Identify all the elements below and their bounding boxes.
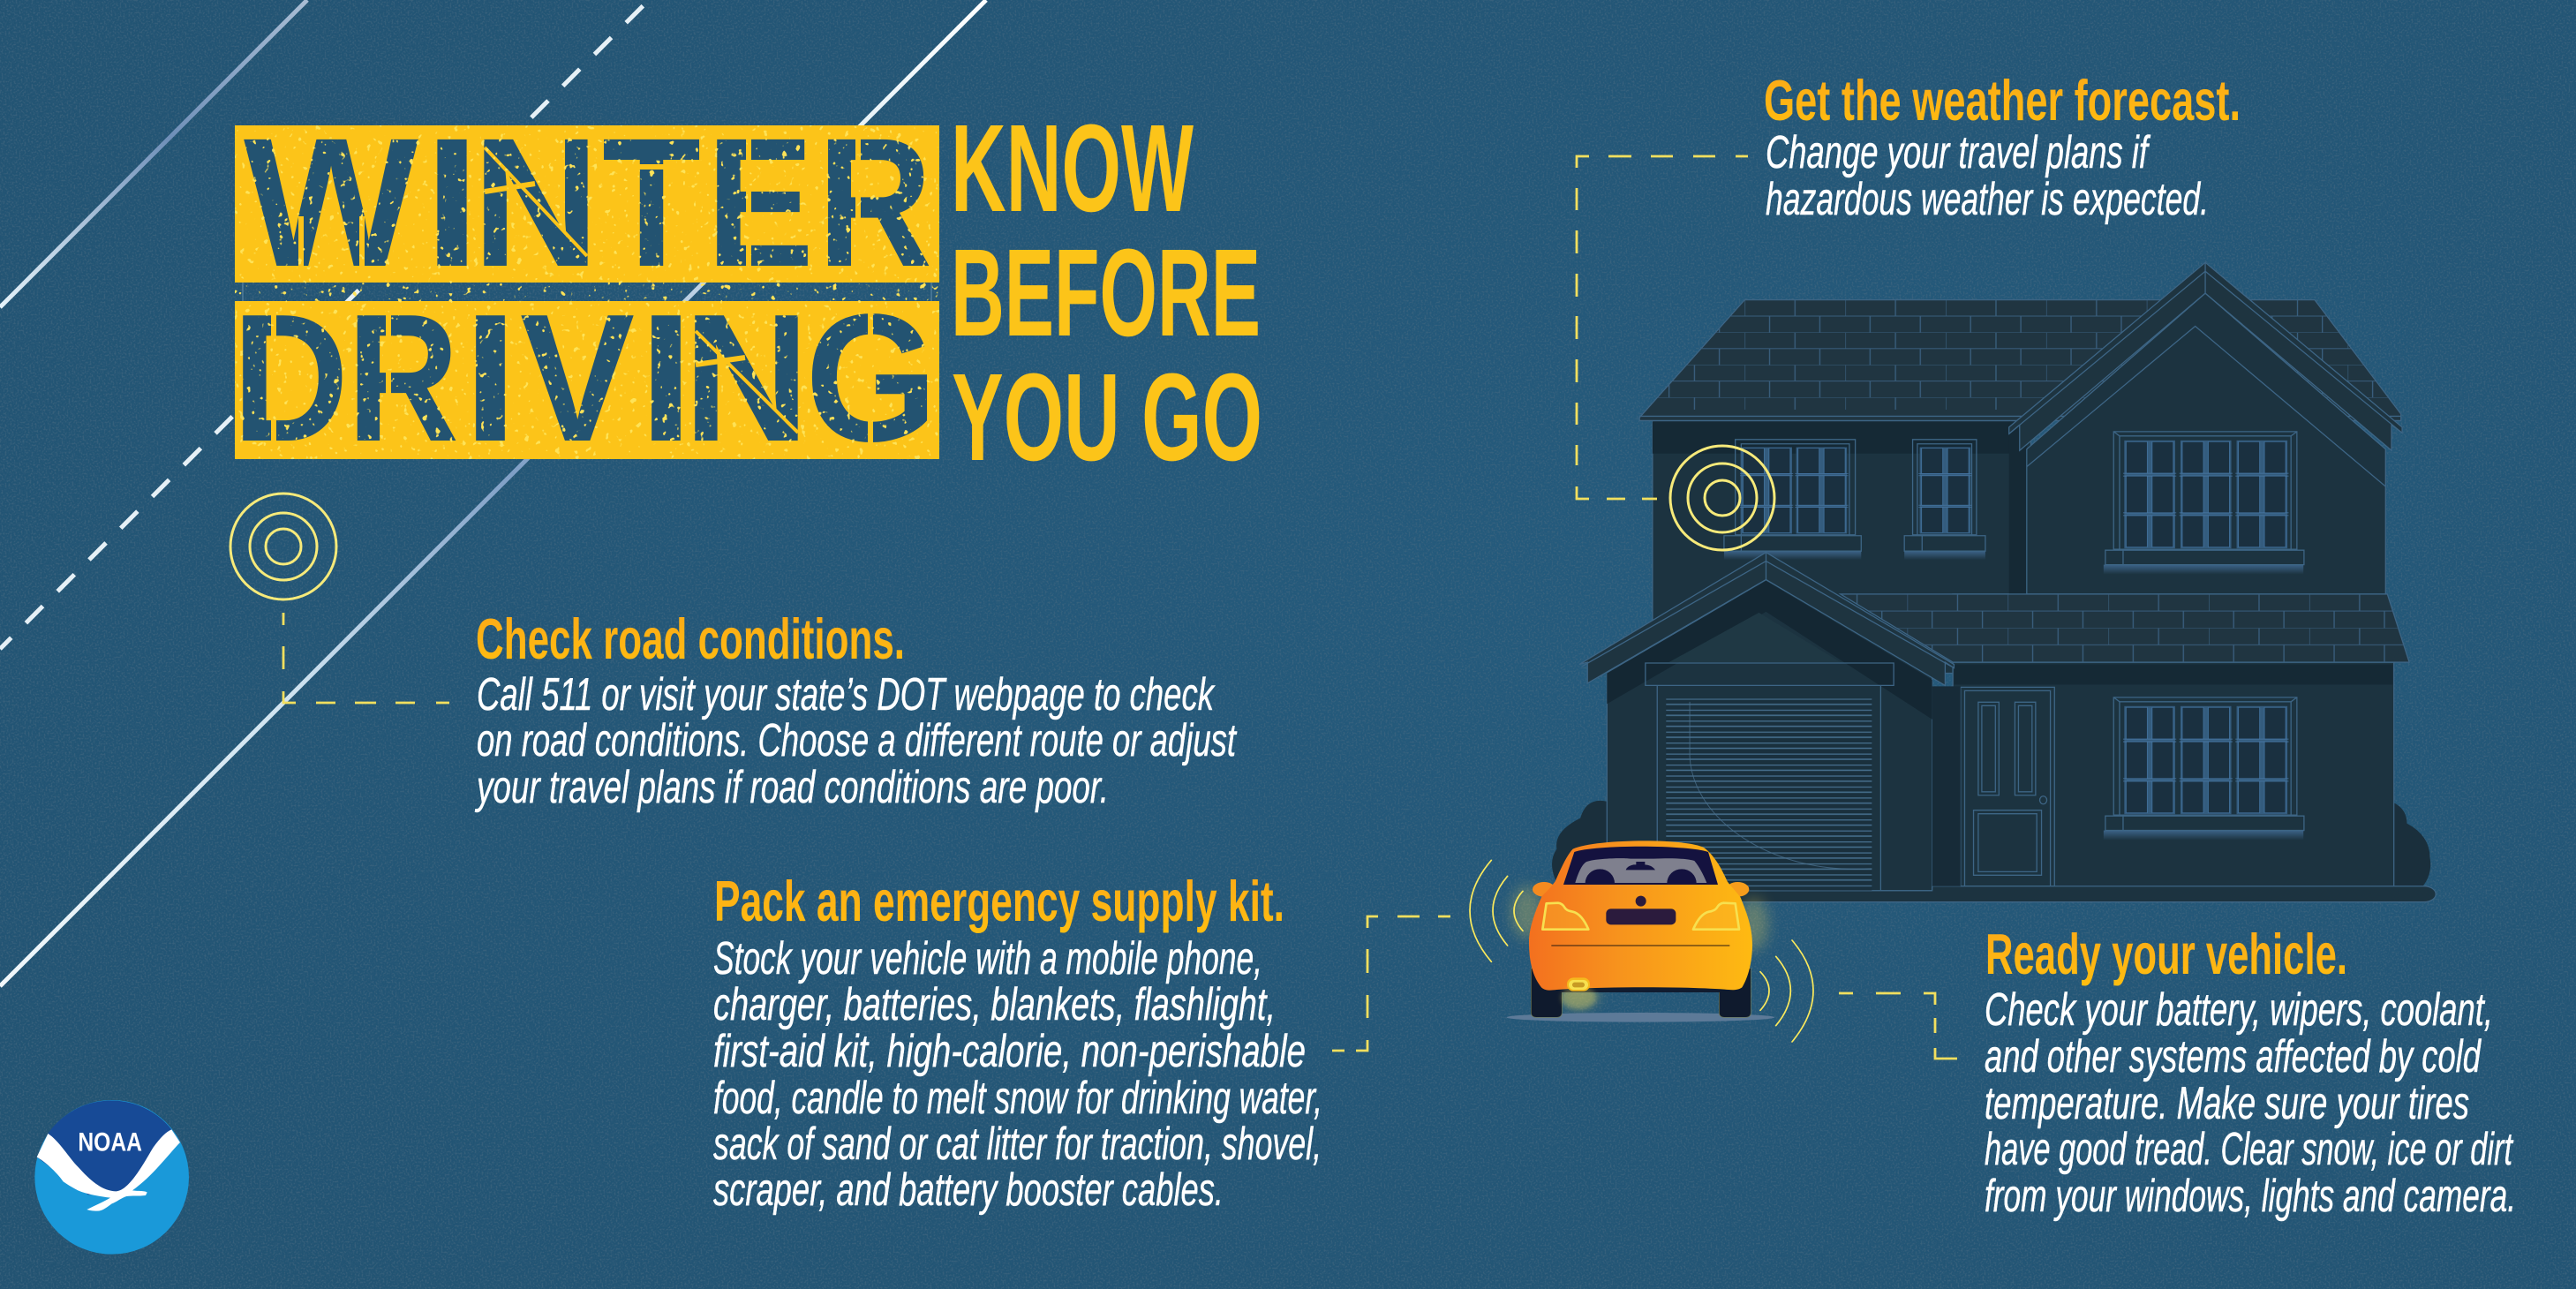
section: pack an emergency supply kit: charger, batteries, blankets, flashlight, [713, 979, 1276, 1030]
section: pack an emergency supply kit [713, 869, 1322, 1216]
window: gable upper [2104, 432, 2304, 575]
section: pack an emergency supply kit: scraper, and battery booster cables. [713, 1165, 1224, 1216]
rear window [1563, 847, 1718, 885]
title: winter driving: N [683, 276, 810, 479]
section: pack an emergency supply kit: sack of sand or cat litter for traction, shovel, [713, 1119, 1322, 1170]
section: get the weather forecast: Change your travel plans if [1766, 127, 2150, 178]
connector: vehicle [1839, 993, 1957, 1059]
bushes [1552, 801, 2430, 893]
title: winter driving: R [817, 101, 932, 305]
car illustration [1470, 840, 1813, 1042]
road shadow [1507, 1013, 1774, 1022]
title: winter driving: R [347, 276, 459, 479]
signal arcs [1470, 860, 1813, 1042]
underbody [1561, 984, 1720, 992]
headlamp glow [1511, 886, 1768, 1008]
upper storey wall [1653, 420, 2030, 673]
title: winter driving: V [520, 276, 635, 479]
target rings: road conditions [230, 494, 336, 599]
title: winter driving: G [805, 276, 938, 479]
road lines [0, 0, 986, 986]
house illustration [1552, 262, 2436, 902]
title: winter driving: D [232, 276, 349, 479]
title: winter driving: T [602, 101, 701, 305]
boot line [1551, 944, 1729, 946]
section: pack an emergency supply kit: Pack an emergency supply kit. [714, 869, 1284, 933]
title: know before you go [951, 98, 1262, 486]
wheels [1531, 969, 1751, 1017]
number plate [1606, 908, 1676, 924]
car body [1529, 840, 1752, 991]
title: know before you go: BEFORE [951, 222, 1261, 362]
section: check road conditions [475, 607, 1238, 813]
section: pack an emergency supply kit: food, candle to melt snow for drinking water, [713, 1073, 1322, 1124]
window: upper left [1724, 440, 1861, 560]
title: winter driving: I [638, 276, 694, 479]
section: pack an emergency supply kit: first-aid kit, high-calorie, non-perishable [713, 1026, 1306, 1077]
tail lights [1542, 903, 1739, 930]
section: ready your vehicle [1985, 922, 2516, 1222]
exhaust [1561, 977, 1596, 1009]
section: get the weather forecast [1764, 68, 2241, 225]
title: winter driving: I [424, 101, 480, 305]
garage gable [1579, 553, 1954, 685]
boot lock [1636, 896, 1646, 907]
connector: forecast [1577, 156, 1748, 499]
title: winter driving: I [463, 276, 518, 479]
section: check road conditions: your travel plans if road conditions are poor. [475, 762, 1109, 813]
title: winter driving: N [472, 101, 599, 305]
title: know before you go: KNOW [951, 98, 1194, 237]
connector: road conditions [283, 613, 449, 703]
title: know before you go: YOU GO [952, 347, 1262, 486]
section: get the weather forecast: hazardous weather is expected. [1766, 174, 2209, 225]
ground base [1722, 886, 2436, 902]
window: upper middle [1904, 440, 1985, 560]
connector: emergency kit [1332, 916, 1450, 1051]
title: winter driving: E [706, 101, 814, 305]
section: ready your vehicle: Ready your vehicle. [1985, 922, 2347, 986]
section: check road conditions: Check road conditions. [476, 607, 905, 671]
section: check road conditions: Call 511 or visit your state’s DOT webpage to check [477, 669, 1216, 720]
section: get the weather forecast: Get the weather forecast. [1764, 68, 2241, 132]
gable front [2009, 262, 2402, 594]
NOAA logo: NOAA [78, 1127, 142, 1157]
main roof [1639, 300, 2401, 420]
title: winter driving [235, 125, 939, 459]
NOAA logo [34, 1100, 189, 1255]
section: check road conditions: on road conditions. Choose a different route or adjust [477, 715, 1238, 766]
section: pack an emergency supply kit: Stock your vehicle with a mobile phone, [713, 933, 1262, 984]
target rings: forecast [1670, 446, 1774, 550]
window: lower right [2104, 697, 2304, 840]
lower roof [1841, 594, 2409, 888]
side mirrors [1533, 882, 1749, 897]
garage [1607, 580, 1961, 891]
front door [1961, 687, 2054, 886]
title: winter driving: W [244, 101, 419, 305]
